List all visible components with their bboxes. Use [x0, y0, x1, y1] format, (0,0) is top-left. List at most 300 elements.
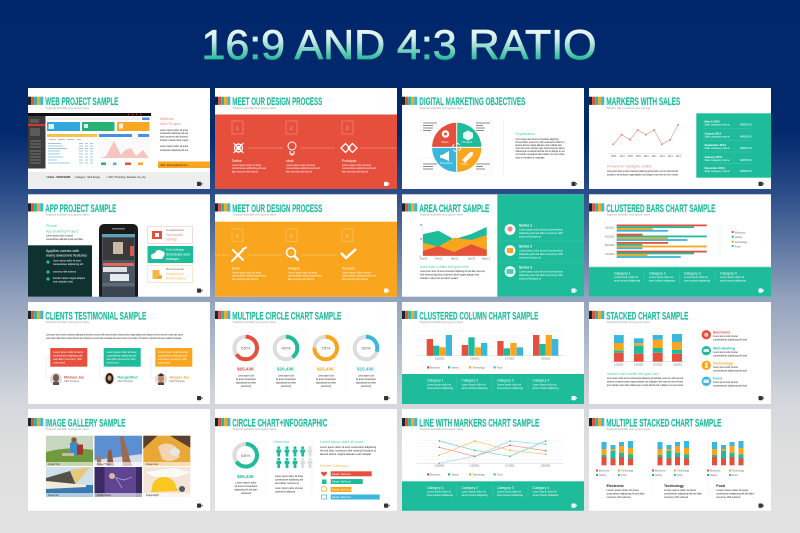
legend: electronic: [702, 330, 747, 342]
feature box: performance: Performance: [166, 276, 186, 280]
step numbers: [232, 121, 353, 134]
icon: logo: [758, 504, 764, 508]
sales panel: Sale category name: [704, 146, 730, 150]
sales panel: August 2012: [704, 132, 722, 136]
icon: magnifier: [286, 248, 298, 260]
client: Hooper Jax: Hooper Jax: [170, 376, 189, 380]
step text: consectetuer adipiscing elit sed: [288, 274, 322, 278]
line chart: 2013: [668, 155, 673, 158]
client: Rungarified: [104, 373, 137, 385]
bar chart: 4/1/2013: [605, 236, 615, 238]
web address bar: [158, 162, 210, 168]
icon: light bulb: [288, 142, 296, 155]
sales panel: Sale category name: [704, 122, 730, 126]
line chart: 1/8/2002: [541, 464, 551, 468]
heading: Topical subtitle text goes here: [45, 212, 90, 216]
donut 75%: [314, 337, 337, 372]
panel: multiple stacked chart: [589, 409, 771, 511]
step text: Lorem ipsum dolor sit amet: [342, 270, 371, 274]
arrows: [248, 147, 397, 149]
testimonial: teal: euismod: [106, 360, 119, 364]
stacked chart: technology: Technology: [664, 484, 684, 488]
chart note: nibh euismod tincidunt ut laoreet dolore magna aliquam erat: [420, 272, 479, 276]
donut captions: adipiscing elit sed diam: [276, 380, 296, 384]
intro text: consectetuer adipiscing elit sed diam: [46, 237, 84, 241]
line chart: 2006: [611, 155, 617, 158]
explanation text: Lorem ipsum dolor sit amet consectetur adipiscing: [516, 137, 559, 141]
icon: series 2: [505, 245, 515, 256]
step text: Define: [232, 159, 242, 163]
category band: Category 4: [532, 378, 549, 382]
category band: Lorem ipsum dolor sit: [532, 382, 557, 386]
heading: CLUSTERED BARS CHART SAMPLE: [606, 203, 716, 215]
image: helmet: Image Eight: [146, 494, 159, 497]
heading: [589, 418, 722, 431]
heading: [28, 310, 147, 324]
step text: diam nonummy nibh euismod: [342, 277, 368, 281]
icon: logo: [197, 288, 202, 293]
category band: Lorem ipsum dolor sit: [462, 382, 486, 386]
project description: consectetur adipiscing elit sed: [160, 148, 188, 152]
stacked chart: food: consectetuer adipiscing elit sed diam: [716, 492, 755, 496]
client: Michael Jax: Michael Jax: [64, 376, 84, 380]
step text: diam nonummy nibh euismod: [342, 170, 368, 174]
stacked chart: technology: Food: [677, 474, 683, 477]
chart note: Preview for highlights subtitle: [607, 164, 653, 168]
legend: Variety: [452, 366, 460, 370]
step numbers: 6: [346, 234, 350, 240]
step text: Build: [232, 266, 240, 270]
explanation text: laoreet dolore magna aliquam erat volutpat wisi: [516, 143, 562, 147]
note lines: [423, 123, 490, 169]
stacked chart: 1/5/2002: [614, 364, 624, 366]
heading: Topical subtitle text goes here: [232, 427, 277, 431]
feature box: performance: [148, 266, 192, 282]
category band: Lorem ipsum dolor sit: [427, 490, 451, 494]
intro text: Phone: [46, 224, 57, 228]
project description: tincidunt ut laoreet dolore magna: [160, 138, 188, 142]
testimonial: teal: sed diam nonummy nibh: [106, 357, 136, 361]
donut 30%: [355, 337, 377, 372]
panel: clustered column chart: [402, 302, 584, 404]
image: sailing: Image Six: [48, 494, 59, 497]
chart note: [607, 164, 678, 176]
step text: Ideal: [286, 159, 294, 163]
heading: Topical subtitle text goes here: [45, 320, 90, 324]
donut caption: euismod: [241, 491, 251, 495]
stacked chart: electronic: Technology: [621, 470, 634, 472]
client: Rungarified: CEO Tempora: [118, 380, 133, 383]
icon: logo: [758, 182, 764, 186]
testimonial: orange: sed diam nonummy nibh: [158, 357, 187, 361]
heading: STACKED CHART SAMPLE: [606, 310, 689, 322]
legend: electronic: Electronic: [713, 330, 730, 334]
icon: check: [341, 249, 356, 258]
client: Hooper Jax: [155, 373, 189, 385]
pictogram notes: Lorem ipsum dolor sit amet: [275, 474, 303, 478]
legend: Electronic: [430, 366, 441, 370]
icon: tools: [232, 248, 246, 261]
legend: [427, 473, 503, 476]
testimonial: teal: [104, 348, 141, 367]
column chart: 1/7/2002: [505, 358, 515, 360]
icon: logo: [572, 504, 577, 508]
step text: consectetuer adipiscing elit sed: [342, 166, 376, 170]
sales panel: $4836.00: [740, 146, 752, 150]
legend: Technology: [735, 241, 748, 244]
heading: Topical subtitle text goes here: [419, 212, 464, 216]
sales panel: September 2014: [704, 143, 726, 147]
icon: logo: [758, 288, 764, 293]
panel: digital marketing objectives: [402, 88, 584, 189]
donut 65%: [234, 337, 257, 372]
dividers: [266, 332, 346, 392]
project details band: [28, 172, 210, 189]
legend: [427, 366, 503, 370]
panel: image gallery: [28, 409, 210, 511]
heading: CIRCLE CHART+INFOGRAPHIC: [232, 418, 327, 430]
phone mockup: [99, 224, 138, 297]
text block: laoreet dolore magna aliquam erat volutpat: [320, 452, 371, 456]
donut captions: euismod: [281, 384, 291, 388]
legend: Food: [497, 366, 503, 370]
icon: series 1: [505, 224, 515, 235]
panel: stacked chart: [589, 302, 771, 404]
arrows: [215, 254, 337, 256]
heading: [215, 96, 323, 110]
heading: What's the numbers are saying: [606, 106, 651, 110]
category band: amet consect adipiscing: [684, 278, 710, 282]
heading: [402, 310, 539, 324]
stacked chart: technology: Electronic: [655, 470, 666, 472]
project description: [160, 117, 188, 152]
dividers: [654, 440, 708, 495]
quadrant chart: Promotion: [440, 161, 453, 165]
stacked chart: 1/7/2002: [653, 364, 663, 366]
heading: CLUSTERED COLUMN CHART SAMPLE: [419, 310, 539, 322]
line chart: 2012: [660, 155, 665, 158]
project description: consectetur adipiscing elit sed: [160, 131, 188, 135]
category band: Lorem ipsum dolor sit: [649, 275, 673, 279]
heading: [28, 418, 126, 431]
pictogram notes: consectetuer adipiscing elit: [275, 478, 303, 482]
donut caption: sit amet consectetur: [234, 484, 258, 488]
step text: consectetuer adipiscing elit sed: [232, 274, 266, 278]
testimonial: red: consectetuer adipiscing elit,: [53, 354, 83, 358]
panel: clients testimonial: [28, 302, 210, 404]
category band: Category 3: [684, 272, 701, 276]
panel: app project sample: [28, 194, 210, 297]
features panel: AppDev comes with: [46, 249, 79, 253]
image: mouse: [143, 436, 190, 466]
legend: food: consectetuer adipiscing elit sed: [713, 384, 747, 388]
pictogram notes: sed diam nonummy: [275, 481, 300, 485]
step text: Prototype: [342, 159, 357, 163]
panel: markers with sales: [589, 88, 771, 189]
step text: Analyze: [288, 266, 300, 270]
step text: diam nonummy nibh euismod: [232, 170, 258, 174]
chart note: Lorem ipsum dolor sit amet consectetur adipiscing elit sed diam nonummy: [420, 269, 485, 273]
chart note: quis nostrud exerci tation ullamcorper suscipit lobortis nisl ut aliquip ex ea commodo: [607, 383, 683, 387]
donut 75%: 75%: [321, 346, 331, 350]
heading: [215, 310, 342, 324]
chart note: volutpat ut wisi enim ad minim veniam: [420, 276, 459, 280]
testimonial: red: [50, 348, 87, 367]
step text: consectetuer adipiscing elit sed: [286, 166, 320, 170]
line chart: 2009: [636, 155, 641, 158]
features panel: Lorem ipsum dolor sit amet: [53, 258, 81, 262]
area chart: Mar/13: [451, 258, 459, 260]
quadrant chart: Place: [442, 140, 449, 144]
column chart: 1/6/2002: [470, 358, 480, 360]
stacked chart: technology: nonummy nibh euismod: [664, 495, 688, 499]
icon: logo: [384, 396, 390, 400]
step numbers: 4: [236, 234, 240, 240]
step text: diam nonummy nibh euismod: [232, 277, 258, 281]
donut caption: Lorem ipsum dolor: [236, 480, 257, 484]
explanation text: [516, 132, 565, 160]
donut captions: sit amet consectetur: [316, 377, 336, 381]
feature box: settings: Your favourite: [166, 233, 183, 237]
series panel: euismod tincidunt ut: [519, 276, 541, 280]
project description: Web Project: [160, 122, 182, 126]
category band: Category 4: [720, 272, 737, 276]
stacked chart: food: Technology: [732, 470, 745, 472]
category bars: Elearn Bell text: [332, 480, 351, 484]
people pictogram: Effective Buyer: [274, 440, 290, 444]
heading: Topical subtitle text goes here: [45, 106, 90, 110]
legend: food: [702, 376, 747, 388]
step text: Lorem ipsum dolor sit amet: [342, 163, 371, 167]
legend: Technology: [472, 366, 485, 370]
image: hiker: [46, 436, 93, 466]
category band: amet consect adipiscing: [497, 386, 523, 390]
heading: [402, 203, 490, 216]
chart note: Stacked chart subtitle here goes here: [607, 372, 659, 376]
testimonial: red: Lorem ipsum dolor sit amet: [53, 350, 83, 354]
quadrant chart: Product: [462, 140, 472, 144]
note boxes: [421, 120, 492, 174]
text block: [320, 440, 376, 456]
stacked chart: 1/8/2002: [673, 364, 683, 366]
stacked chart: electronic: Electronic: [606, 484, 624, 488]
category band: amet consect adipiscing: [427, 493, 453, 497]
explanation text: Explanation: [516, 132, 535, 136]
legend: technology: Lorem ipsum dolor sit amet: [713, 365, 738, 369]
legend: Electronic: [430, 474, 441, 476]
icon: diamonds: [341, 144, 357, 152]
sales panel: December 2014: [704, 166, 725, 170]
stacked chart: food: Food: [732, 474, 738, 477]
category band: Category 1: [614, 272, 631, 276]
step text: diam nonummy nibh euismod: [288, 277, 314, 281]
testimonial: orange: consectetuer adipiscing elit,: [158, 354, 188, 358]
step numbers: [232, 229, 353, 242]
step text: [232, 159, 376, 174]
category band: [402, 481, 584, 511]
series panel: Lorem ipsum dolor sit amet consectetuer: [519, 228, 563, 232]
icon: logo: [758, 396, 764, 400]
area chart: Feb/13: [435, 258, 443, 260]
chart note: Area chart subtitle text goes here: [420, 265, 469, 269]
category bars: Elearn Bell text: [332, 488, 351, 492]
category band: Lorem ipsum dolor sit: [497, 490, 521, 494]
icon: megaphone: [440, 151, 449, 161]
chart note: tincidunt ut laoreet dolore magna aliquam erat volutpat ut wisi enim ad minim veniam: [607, 172, 678, 176]
testimonial: orange: [155, 348, 192, 367]
series panel: [497, 194, 584, 297]
line chart: 1/5/2002: [435, 464, 445, 468]
heading: Topical subtitle text goes here: [606, 212, 651, 216]
legend: web hosting: Lorem ipsum dolor sit amet: [713, 350, 738, 354]
step text: Lorem ipsum dolor sit amet: [232, 270, 261, 274]
series panel: Series 1: [519, 224, 532, 228]
explanation text: dolor in hendrerit in vulputate: [516, 156, 545, 160]
project description: diam nonummy nibh euismod: [160, 134, 188, 138]
donut captions: sit amet consectetur: [276, 377, 296, 381]
step numbers: 2: [290, 126, 294, 132]
category band: Lorem ipsum dolor sit: [532, 490, 557, 494]
category bars: Elearn Bell text: [332, 472, 351, 476]
panel: web project sample: [28, 88, 210, 189]
icon: logo: [384, 182, 390, 186]
series panel: Lorem ipsum dolor sit amet consectetuer: [519, 270, 563, 274]
legend: [732, 231, 748, 248]
intro text: [46, 332, 183, 340]
donut captions: sit amet consectetur: [236, 377, 256, 381]
area chart: 35: [420, 224, 423, 227]
testimonial: teal: Lorem ipsum dolor sit amet: [106, 350, 137, 354]
category band: [402, 374, 584, 404]
stacked chart: electronic: consectetuer adipiscing elit sed diam: [606, 492, 645, 496]
series panel: adipiscing elit sed diam nonummy nibh: [519, 273, 563, 277]
donut captions: [236, 374, 376, 388]
donut 75%: $25,436: [317, 366, 334, 372]
heading: [402, 418, 540, 431]
sales panel: Sale category name: [704, 169, 730, 173]
panel: multiple circle chart: [215, 302, 397, 404]
heading: APP PROJECT SAMPLE: [45, 203, 117, 215]
heading: MEET OUR DESIGN PROCESS: [232, 203, 323, 215]
donut caption: [234, 480, 258, 495]
image: helmet: [143, 467, 190, 497]
bar chart: 5/1/2013: [605, 244, 615, 247]
text block: Lorem ipsum dolor sit amet consectetur adipiscing: [320, 445, 376, 449]
intro text: [46, 224, 84, 241]
stacked chart: technology: Lorem ipsum dolor sit amet: [664, 488, 696, 492]
heading: [589, 310, 689, 324]
column chart: [417, 331, 564, 360]
heading: Topical subtitle text goes here: [45, 427, 90, 431]
line chart: 2007: [620, 155, 625, 158]
connectors: [46, 357, 155, 378]
step numbers: 1: [236, 126, 240, 132]
legend: web hosting: consectetuer adipiscing elit sed: [713, 354, 747, 358]
series panel: Series 3: [519, 266, 532, 270]
legend: Food: [735, 245, 741, 248]
heading: MARKERS WITH SALES: [606, 96, 681, 108]
chart note: [607, 372, 683, 387]
donut caption: adipiscing elit sed diam: [234, 488, 258, 492]
donut captions: euismod: [241, 384, 251, 388]
chart note: Lorem ipsum dolor sit amet consectetur adipiscing elit sed diam nonummy nibh euismod: [607, 169, 678, 173]
sales panel: Sale category name: [704, 134, 730, 138]
icon: series 3: [505, 266, 515, 277]
area chart: 0: [420, 256, 422, 258]
panel: design process 1-3: [215, 88, 397, 189]
category band: [589, 267, 771, 297]
explanation text: elit sed diam nonummy nibh euismod tincidunt ut: [516, 140, 565, 144]
area chart: 15: [420, 238, 423, 241]
stacked chart: food: nonummy nibh euismod: [716, 495, 741, 499]
stacked chart: food: [707, 441, 755, 499]
stacked chart: 1/6/2002: [634, 364, 644, 366]
red band: [215, 114, 397, 189]
heading: CLIENTS TESTIMONIAL SAMPLE: [45, 310, 147, 322]
heading: Topical subtitle text goes here: [419, 106, 464, 110]
web address bar: Web : www.mydomain.com: [160, 163, 188, 167]
image: mouse: Image Four: [146, 463, 158, 466]
text block: elit sed diam nonummy nibh euismod tincidunt ut: [320, 448, 376, 452]
donut 30%: 30%: [361, 346, 371, 350]
stacked chart: [611, 333, 686, 366]
step text: Success: [342, 266, 355, 270]
legend: technology: Technology: [713, 362, 733, 366]
donut captions: euismod: [321, 384, 331, 388]
donut 65%: $65,436: [237, 474, 254, 479]
bar chart: 7/1/2013: [605, 253, 615, 256]
client: Rungarified: Rungarified: [118, 376, 137, 380]
bar chart: 3/1/2013: [605, 226, 615, 230]
orange band: [215, 222, 397, 297]
project description: Lorem ipsum dolor sit amet: [160, 128, 188, 132]
features panel: many awesome features: [46, 254, 87, 258]
category band: amet consect adipiscing: [614, 278, 640, 282]
dashboard screenshot: [28, 113, 151, 168]
heading: MULTIPLE CIRCLE CHART SAMPLE: [232, 310, 342, 322]
divider: [502, 119, 504, 175]
legend: technology: [702, 361, 747, 372]
category band: amet consect adipiscing: [462, 386, 488, 390]
heading: [402, 96, 526, 110]
heading: AREA CHART SAMPLE: [419, 203, 490, 215]
legend: Variety: [735, 236, 743, 239]
icon: logo: [384, 288, 390, 293]
heading: Topical subtitle text goes here: [606, 320, 651, 324]
category band: amet consect adipiscing: [427, 386, 453, 390]
category band: Lorem ipsum dolor sit: [427, 382, 451, 386]
legend: Variety: [452, 474, 460, 476]
image: sailing: [46, 467, 93, 497]
heading: [215, 203, 323, 216]
panel: area chart sample: [402, 194, 584, 297]
stacked chart: food: Electronic: [710, 470, 721, 472]
legend: Technology: [472, 474, 485, 476]
donut captions: Lorem ipsum dolor: [238, 374, 254, 378]
donut captions: adipiscing elit sed diam: [316, 380, 336, 384]
features panel: consectetuer adipiscing elit: [53, 262, 83, 266]
category band: Category 2: [649, 272, 666, 276]
sales panel: $4836.00: [740, 158, 752, 162]
feature box: settings: settings: [166, 238, 177, 242]
stacked chart: technology: Variety: [655, 474, 663, 477]
chart note: [420, 265, 485, 280]
step text: diam nonummy nibh euismod: [286, 170, 312, 174]
explanation text: enim ad minim veniam quis nostrud exerci tation: [516, 146, 565, 150]
people pictogram: [274, 440, 312, 468]
icon: place pin: [442, 130, 449, 138]
step text: Lorem ipsum dolor sit amet: [286, 163, 315, 167]
